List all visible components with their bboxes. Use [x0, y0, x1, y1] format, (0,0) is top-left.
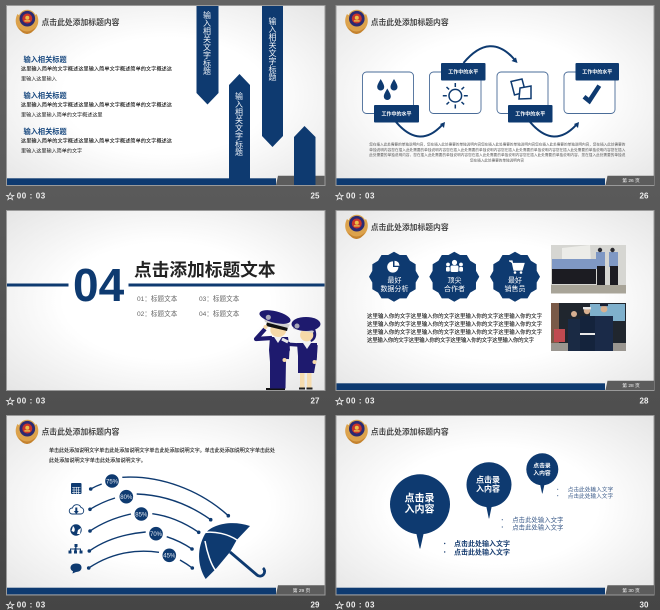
arrow 4: [294, 126, 316, 185]
timing labels row 1: 25: [310, 192, 320, 201]
page tab 28: 第 28 页: [622, 382, 640, 389]
heading 28: 点击此处添加标题内容: [371, 222, 449, 232]
text block 28: 这里输入你的文字这里输入你的文字这里输入你的文字这里输入你的文字: [367, 328, 542, 336]
badge 2: 合作者: [444, 284, 465, 293]
pin small: 入内容: [533, 469, 551, 477]
text block 3: 输入相关标题: [24, 127, 67, 136]
box 4 check: [564, 72, 615, 114]
percent 80: 80%: [120, 495, 133, 501]
emblem 25: [16, 10, 38, 34]
icon: cloud: [69, 505, 84, 514]
bullets small: 点击此处输入文字: [568, 492, 614, 500]
section list: 04：标题文本: [199, 309, 240, 318]
label 1: [374, 105, 419, 122]
arrow 3: [229, 74, 250, 185]
arrow 1: [196, 6, 218, 104]
icon: calendar: [71, 483, 82, 494]
box 1 drops: [362, 72, 414, 114]
percent 75: 75%: [106, 479, 119, 485]
panel: slide 28: [336, 210, 654, 390]
panel: slide 25: [6, 6, 325, 186]
page tab 28: [606, 381, 654, 390]
label 3: 工作中的水平: [515, 110, 545, 118]
percent 75: [105, 474, 119, 488]
icon: police cartoon: [256, 308, 320, 390]
photo 2: [551, 303, 626, 351]
photo 1: [551, 245, 626, 294]
footer bar 30: [336, 588, 605, 594]
label 2: [441, 63, 486, 80]
section list: 02：标题文本: [137, 309, 178, 318]
icon: globe: [70, 524, 82, 536]
timing labels row 2: 00 : 03: [17, 397, 46, 406]
heading 25: 点击此处添加标题内容: [42, 17, 120, 27]
intro text: 此处添加说明文字单击此处添加说明文字。: [49, 457, 146, 464]
emblem 26: [345, 10, 368, 34]
icon: umbrella: [199, 523, 265, 579]
box 3 papers: [497, 72, 548, 114]
bullets medium: 点击此处输入文字: [512, 522, 563, 531]
percent 80: [120, 490, 133, 504]
text block 1: 输入相关标题: [24, 55, 67, 64]
percent 70: 70%: [150, 532, 163, 538]
pin large: [390, 474, 450, 548]
paragraph 26: [369, 142, 626, 162]
page tab 30: 第 30 页: [622, 587, 640, 594]
paragraph 26: 此处需要的单独说明内容，您在插入此处需要的单独说明内容您在插入此处需要的单独说明内容您在插入此处需要的单独说明内容，您在插入此处需要的单独说: [369, 152, 626, 157]
pin medium: 点击录: [476, 474, 500, 484]
badge 3: [490, 252, 540, 302]
text block 3: 这里输入简单的文字概述这里输入简单文字概述简单的文字概述这: [21, 138, 172, 144]
divider left: [7, 284, 68, 286]
badge 3: 最好: [508, 276, 522, 284]
pin small: [526, 453, 558, 494]
timing labels row 2: 00 : 03: [346, 397, 375, 406]
paragraph 26: 您在插入此处需要的单独说明内容: [470, 157, 524, 162]
arrow curve a: [396, 122, 445, 137]
text block 28: [367, 312, 542, 344]
percent 45: 45%: [163, 554, 176, 560]
text block 1: 里输入这里输入: [21, 76, 57, 82]
arrow 3: 输入相关文字标题: [234, 91, 244, 157]
arrow 1: 输入相关文字标题: [202, 10, 212, 76]
footer bar 29: [7, 588, 276, 594]
text block 1: [21, 55, 172, 82]
panel: slide 26: [336, 6, 654, 186]
section list: [137, 294, 240, 318]
panel: slide 30: [336, 416, 654, 595]
timing labels row 3: [7, 601, 649, 610]
box 2 sun: [430, 72, 481, 114]
label 4: 工作中的水平: [582, 68, 612, 76]
emblem 30: [345, 420, 368, 444]
panel: slide 29: [6, 416, 325, 595]
bullets large: [444, 539, 510, 556]
pin large: 点击录: [404, 492, 434, 504]
timing labels row 3: 00 : 03: [17, 601, 46, 610]
badge 3: 销售员: [504, 284, 526, 293]
bullets small: 点击此处输入文字: [568, 486, 614, 494]
badge 1: [369, 252, 419, 302]
label 3: [508, 105, 552, 122]
pin medium: 入内容: [476, 484, 500, 494]
arrow curve b: [464, 46, 518, 63]
pin small: 点击录: [533, 462, 551, 470]
timing labels row 2: 28: [640, 397, 649, 406]
badge 2: 顶尖: [448, 276, 462, 284]
badge 1: 最好: [388, 276, 402, 284]
timing labels row 3: 30: [640, 601, 649, 610]
heading 29: 点击此处添加标题内容: [42, 427, 120, 437]
page tab 25: [276, 176, 324, 185]
intro text: 单击此处添加说明文字单击此处添加说明文字单击此处添加说明文字。单击此处添加说明文字单击此处: [49, 447, 275, 454]
page tab 26: [606, 176, 654, 185]
text block 3: [21, 127, 172, 154]
pin medium: [466, 462, 512, 518]
text block 28: 这里输入你的文字这里输入你的文字这里输入你的文字这里输入你的文字: [367, 336, 534, 344]
badge 2: [429, 252, 479, 302]
section number: 04: [73, 259, 125, 311]
section list: 03：标题文本: [199, 294, 240, 303]
emblem 28: [345, 215, 368, 239]
divider right: [128, 284, 324, 286]
badge 1: 数据分析: [380, 284, 408, 293]
emblem 29: [16, 420, 38, 444]
panel: slide 27: [6, 210, 325, 390]
heading 26: 点击此处添加标题内容: [371, 17, 449, 27]
page tab 30: [606, 585, 654, 594]
page tab 26: 第 26 页: [622, 177, 640, 184]
percent 85: [134, 507, 148, 521]
footer bar 26: [336, 178, 605, 185]
text block 2: 输入相关标题: [24, 91, 67, 100]
section title: 点击添加标题文本: [134, 259, 276, 280]
bullets medium: 点击此处输入文字: [512, 515, 563, 524]
timing labels row 1: [7, 192, 649, 201]
text block 28: 这里输入你的文字这里输入你的文字这里输入你的文字这里输入你的文字: [367, 312, 542, 320]
bullets small: [557, 486, 614, 500]
page tab 29: 第 29 页: [293, 587, 310, 594]
percent 70: [149, 527, 163, 540]
timing labels row 3: 00 : 03: [346, 601, 375, 610]
pin large: 入内容: [404, 503, 434, 516]
arrow 2: [262, 6, 283, 147]
paragraph 26: 单独说明内容您在插入此处需要的单独说明内容您在插入此处需要的单独说明内容您在插入此处需要的单独说明内容您在插入此处需要的单独说明内容您在插入: [369, 147, 626, 152]
text block 2: 这里输入简单的文字概述这里输入简单文字概述简单的文字概述这: [21, 102, 172, 108]
intro text: [49, 447, 275, 464]
timing labels row 3: 29: [310, 601, 320, 610]
icon: speech bubble: [70, 564, 82, 574]
label 4: [576, 63, 619, 80]
text block 1: 这里输入简单的文字概述这里输入简单文字概述简单的文字概述这: [21, 66, 172, 72]
footer bar 28: [336, 383, 605, 390]
bullets large: 点击此处输入文字: [454, 539, 510, 548]
text block 2: [21, 91, 172, 118]
timing labels row 2: [7, 397, 649, 406]
timing labels row 1: 00 : 03: [346, 192, 375, 201]
percent 85: 85%: [135, 512, 148, 518]
heading 30: 点击此处添加标题内容: [371, 427, 449, 437]
bullets medium: [502, 515, 563, 531]
label 1: 工作中的水平: [381, 110, 412, 118]
timing labels row 1: 00 : 03: [17, 192, 46, 201]
bullets large: 点击此处输入文字: [454, 548, 510, 556]
timing labels row 1: 26: [640, 192, 649, 201]
text block 2: 里输入这里输入简单的文字概述这里: [21, 112, 103, 118]
text block 3: 里输入这里输入简单的文字: [21, 148, 82, 154]
paragraph 26: 您在插入此处需要的单独说明内容，您在插入此处需要的单独说明内容您在插入此处需要的单独说明内容您在插入此处需要的单独说明内容，您在插入此处需要的: [369, 142, 626, 147]
arc chart: [87, 477, 230, 570]
arrow curve c: [530, 122, 579, 137]
icon: org chart: [68, 544, 82, 554]
arrow 2: 输入相关文字标题: [268, 16, 277, 82]
page tab 29: [276, 585, 324, 594]
footer bar 25: [7, 178, 276, 185]
section list: 01：标题文本: [137, 294, 178, 303]
label 2: 工作中的水平: [448, 68, 478, 76]
text block 28: 这里输入你的文字这里输入你的文字这里输入你的文字这里输入你的文字: [367, 320, 542, 328]
percent 45: [162, 548, 176, 562]
timing labels row 2: 27: [310, 397, 320, 406]
